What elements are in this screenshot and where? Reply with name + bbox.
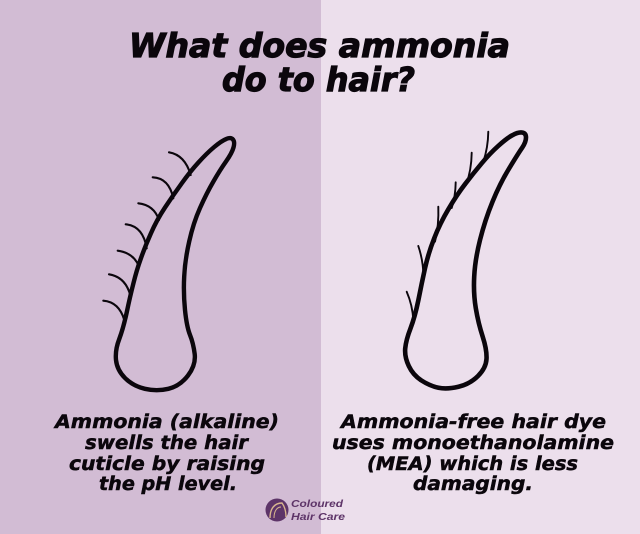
panel: left background [0, 0, 321, 534]
text block: ammonia effect: Ammonia (alkaline) [53, 412, 279, 433]
title: What does ammonia [129, 26, 510, 65]
text block: ammonia-free effect: (MEA) which is less [367, 454, 578, 475]
text block: ammonia-free effect: damaging. [413, 474, 533, 495]
logo icon [266, 498, 288, 522]
text block: ammonia-free effect: uses monoethanolamine [332, 433, 614, 454]
text block: ammonia-free effect: Ammonia-free hair dye [339, 412, 606, 433]
text block: ammonia effect: cuticle by raising [69, 454, 265, 475]
logo text: Hair Care [291, 512, 346, 523]
text block: ammonia-free effect [332, 412, 614, 495]
logo text [291, 499, 346, 523]
logo: Coloured Hair Care [266, 498, 346, 523]
logo text: Coloured [291, 499, 344, 510]
icon: hair with raised cuticle (ammonia) [103, 138, 234, 390]
flattened cuticle scales [407, 132, 488, 320]
cuticle scales [103, 152, 191, 320]
panel: right background [321, 0, 640, 534]
text block: ammonia effect [53, 412, 279, 495]
title [129, 26, 510, 99]
text block: ammonia effect: swells the hair [85, 433, 250, 454]
icon: hair with flat cuticle (ammonia-free) [405, 132, 526, 388]
title: do to hair? [222, 60, 415, 99]
text block: ammonia effect: the pH level. [99, 474, 237, 495]
